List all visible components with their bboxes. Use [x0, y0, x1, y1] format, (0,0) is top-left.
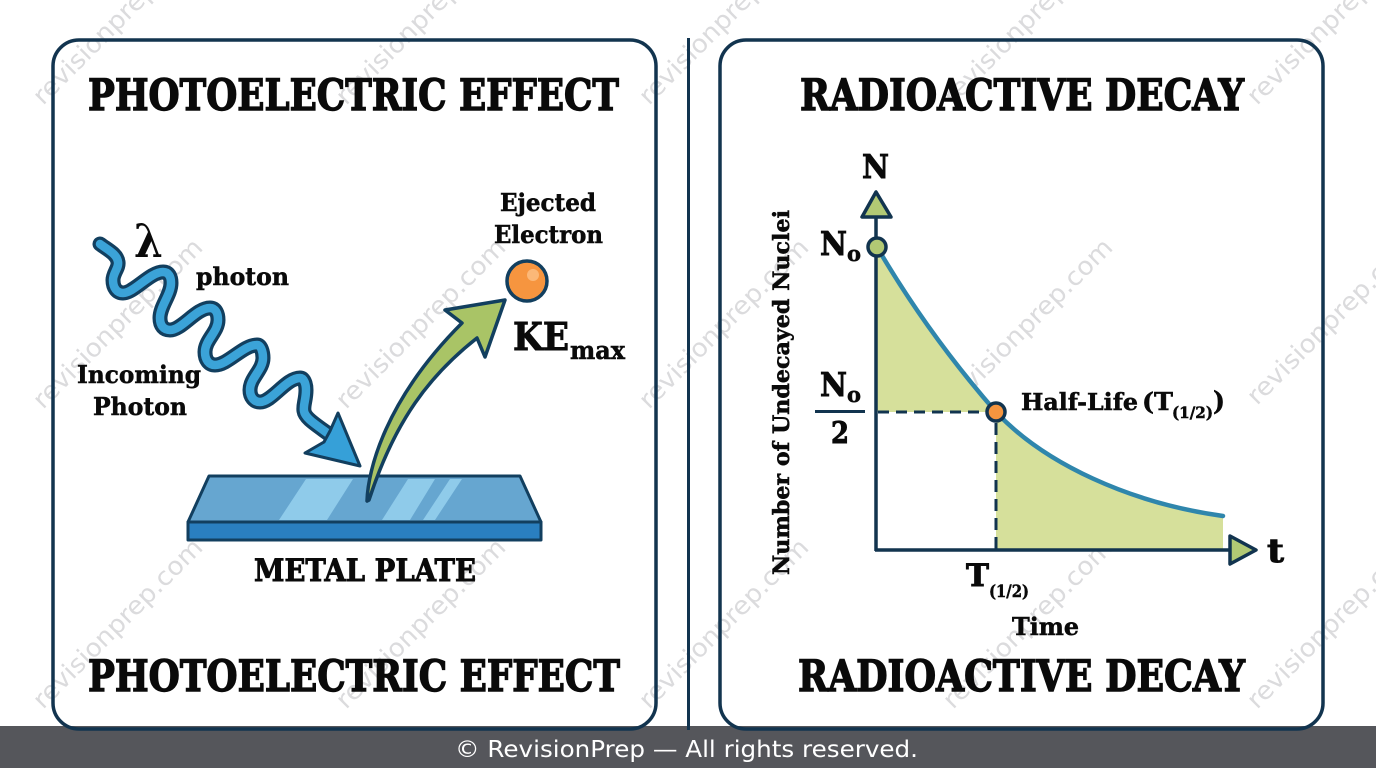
- label: half-life: Half-Life: [1021, 389, 1138, 416]
- marker: N0 point: [868, 238, 886, 256]
- label: ejected electron: [494, 188, 603, 249]
- label: N0 over 2: [815, 365, 865, 451]
- label: time: Time: [1012, 612, 1079, 641]
- watermarks: revisionprep.com: [937, 233, 1118, 414]
- watermarks: revisionprep.com: [27, 533, 208, 714]
- label: half-life: [1021, 387, 1225, 422]
- label: lambda: λ: [134, 214, 163, 268]
- center divider: [687, 38, 690, 730]
- metal plate: [188, 476, 541, 540]
- label: half-life: ): [1213, 387, 1225, 417]
- label: half-life: (1/2): [1172, 403, 1213, 422]
- panel frame: radioactive decay: [720, 40, 1323, 729]
- y axis: [862, 192, 891, 551]
- heading: photoelectric effect bottom: PHOTOELECTRIC EFFECT: [88, 652, 620, 702]
- footer bar: [0, 726, 1376, 768]
- label: y axis title: Number of Undecayed Nuclei: [769, 210, 795, 575]
- label: N0: N: [820, 224, 847, 263]
- label: N0: [820, 224, 861, 266]
- label: incoming photon: Photon: [93, 392, 187, 421]
- watermarks: revisionprep.com: [330, 233, 511, 414]
- icon: ejected electron arrow: [367, 300, 505, 501]
- label: N0: o: [847, 241, 861, 266]
- shaded area after half-life: [996, 412, 1223, 550]
- label: N0 over 2: o: [847, 382, 861, 407]
- label: KE max: [513, 314, 626, 365]
- decay chart: [862, 192, 1256, 564]
- label: metal plate: METAL PLATE: [254, 553, 476, 589]
- x axis: [875, 536, 1256, 564]
- dashed guide lines: [878, 412, 996, 549]
- label: KE max: max: [570, 336, 626, 365]
- watermarks: revisionprep.com: [27, 233, 208, 414]
- label: incoming photon: Incoming: [77, 360, 201, 389]
- label: T half: [966, 558, 1029, 602]
- icon: electron: [507, 261, 547, 301]
- label: t axis: t: [1267, 531, 1285, 570]
- label: KE max: KE: [513, 314, 569, 359]
- panel: photoelectric effect: [53, 40, 656, 729]
- label: T half: T: [966, 558, 989, 594]
- icon: wavy incoming photon arrow: [100, 244, 360, 466]
- label: half-life: (T: [1142, 387, 1173, 416]
- watermarks: revisionprep.com: [633, 233, 814, 414]
- label: ejected electron: Ejected: [500, 188, 596, 217]
- label: N0 over 2: N: [820, 365, 847, 404]
- watermarks: revisionprep.com: [937, 533, 1118, 714]
- panel frame: photoelectric effect: [53, 40, 656, 729]
- heading: radioactive decay bottom: RADIOACTIVE DECAY: [798, 652, 1246, 702]
- label: T half: (1/2): [989, 582, 1029, 602]
- heading: radioactive decay top: RADIOACTIVE DECAY: [800, 71, 1245, 121]
- watermarks: revisionprep.com: [330, 533, 511, 714]
- label: N0 over 2: 2: [831, 416, 849, 451]
- label: incoming photon: [77, 360, 201, 421]
- label: photon: photon: [196, 262, 289, 291]
- label: ejected electron: Electron: [494, 220, 603, 249]
- panel: radioactive decay: [720, 40, 1323, 729]
- marker: half-life point: [987, 403, 1005, 421]
- label: N axis: N: [862, 147, 889, 186]
- shaded area before half-life: [877, 247, 996, 412]
- decay curve: [877, 247, 1223, 516]
- watermarks: revisionprep.com: [633, 533, 814, 714]
- footer text: © RevisionPrep — All rights reserved.: [455, 737, 918, 763]
- heading: photoelectric effect top: PHOTOELECTRIC EFFECT: [88, 71, 619, 121]
